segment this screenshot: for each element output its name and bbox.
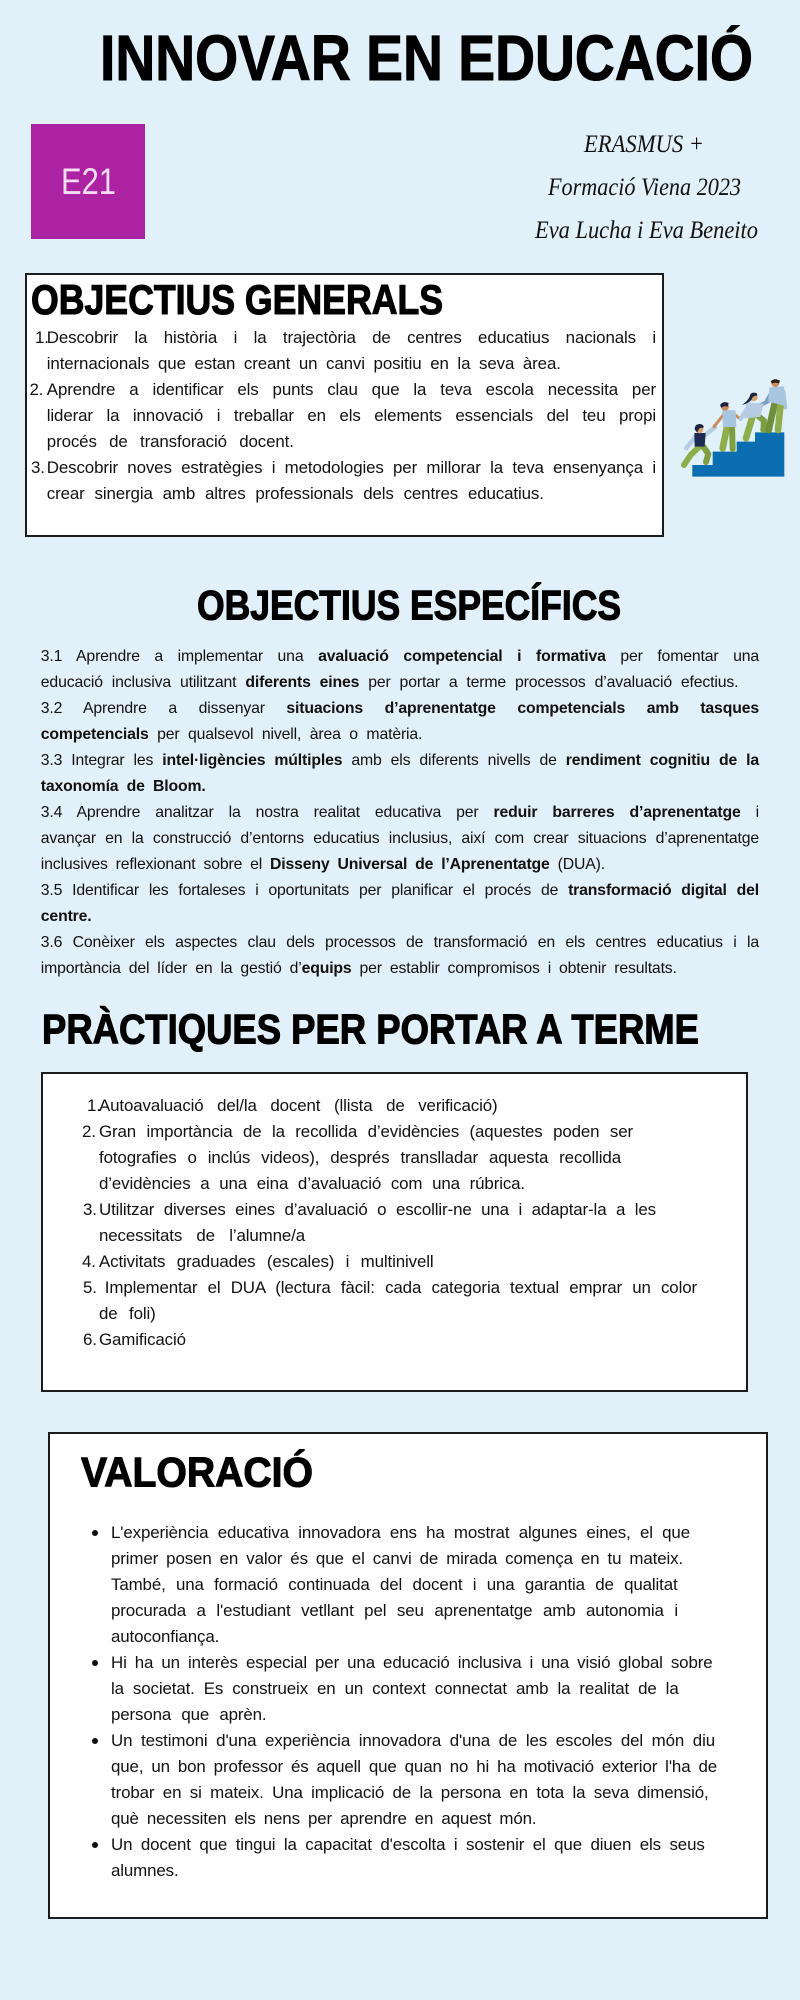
list: general objectives: Descobrir noves estratègies i metodologies per millorar la teva ensenyança i: [47, 458, 656, 477]
list: practices: 2.: [82, 1122, 96, 1141]
list: evaluation bullets: que, un bon professor és aquell que quan no hi ha motivació exterior l'ha de: [111, 1757, 717, 1776]
list: general objectives: crear sinergia amb altres professionals dels centres educatius.: [47, 484, 544, 503]
person 1: [684, 424, 715, 465]
text block: specific objectives: competencials per qualsevol nivell, àrea o matèria.: [41, 726, 422, 742]
text block: specific objectives: [40, 648, 760, 976]
text block: specific objectives: 3.5 Identificar les fortaleses i oportunitats per planificar el procés de transformació digital del: [41, 882, 759, 898]
list: evaluation bullets: què necessiten els nens per aprendre en aquest món.: [111, 1809, 536, 1828]
list: practices: [82, 1096, 697, 1349]
subtitle: Erasmus, training and authors: [534, 131, 758, 244]
list: practices: Gamificació: [99, 1330, 186, 1349]
panel: valoració: [48, 1432, 768, 1919]
text block: specific objectives: 3.4 Aprendre analitzar la nostra realitat educativa per reduir barreres d’aprenentatge i: [41, 804, 759, 820]
list: evaluation bullets: trobar en si mateix. Una implicació de la persona en tota la seva dimensió,: [111, 1783, 709, 1802]
text block: specific objectives: taxonomía de Bloom.: [41, 778, 206, 794]
person 2: [714, 402, 741, 449]
list: evaluation bullets: procurada a l'estudiant vetllant pel seu aprenentatge amb autonomia i: [111, 1601, 678, 1620]
list: general objectives: 3.: [31, 458, 45, 477]
list: practices: 4.: [82, 1252, 96, 1271]
list: evaluation bullets: alumnes.: [111, 1861, 179, 1880]
text block: specific objectives: 3.6 Conèixer els aspectes clau dels processos de transformació en els centres educatius i la: [41, 934, 759, 950]
list: evaluation bullets: Un docent que tingui la capacitat d'escolta i sostenir el que diuen els seus: [111, 1835, 705, 1854]
text block: specific objectives: importància del líder en la gestió d’equips per establir compromisos i obtenir resultats.: [41, 960, 677, 976]
list: practices: 3.: [83, 1200, 97, 1219]
list: practices: de foli): [99, 1304, 156, 1323]
text block: specific objectives: centre.: [41, 908, 92, 924]
panel: pràctiques: [41, 1072, 748, 1392]
subtitle: Erasmus, training and authors: Formació Viena 2023: [547, 174, 741, 201]
list: practices: Autoavaluació del/la docent (llista de verificació): [99, 1096, 498, 1115]
text block: specific objectives: inclusives reflexionant sobre el Disseny Universal de l’Aprenentatge (DUA).: [41, 856, 605, 872]
list: practices: Activitats graduades (escales) i multinivell: [99, 1252, 434, 1271]
list: evaluation bullets: També, una formació continuada del docent i una garantia de qualitat: [111, 1575, 678, 1594]
list: practices: necessitats de l’alumne/a: [99, 1226, 305, 1245]
list: practices: fotografies o inclús videos), després translladar aquesta recollida: [99, 1148, 621, 1167]
list: practices: 1.: [87, 1096, 101, 1115]
list: evaluation bullets: persona que aprèn.: [111, 1705, 266, 1724]
text block: specific objectives: 3.2 Aprendre a dissenyar situacions d’aprenentatge competencials amb tasques: [41, 700, 759, 716]
list: practices: d’evidències a una eina d’avaluació com una rúbrica.: [99, 1174, 525, 1193]
list: general objectives: [30, 328, 656, 503]
list: practices: Implementar el DUA (lectura fàcil: cada categoria textual emprar un color: [105, 1278, 697, 1297]
subtitle: Erasmus, training and authors: ERASMUS +: [583, 131, 704, 158]
list: practices: Gran importància de la recollida d’evidències (aquestes poden ser: [99, 1122, 633, 1141]
list: general objectives: Aprendre a identificar els punts clau que la teva escola necessita per: [47, 380, 656, 399]
text block: specific objectives: 3.1 Aprendre a implementar una avaluació competencial i formativa per fomentar una: [41, 648, 759, 664]
list: general objectives: 2.: [30, 380, 43, 399]
list: general objectives: internacionals que estan creant un canvi positiu en la seva àrea.: [47, 354, 561, 373]
icon: people climbing stairs helping each other: [681, 379, 788, 477]
list: evaluation bullets: primer posen en valor és que el canvi de mirada comença en tu mateix.: [111, 1549, 683, 1568]
list: practices: 6.: [83, 1330, 97, 1349]
icon: E21 logo: E21: [61, 161, 116, 202]
text block: specific objectives: 3.3 Integrar les intel·ligències múltiples amb els diferents nivells de rendiment cognitiu de la: [41, 752, 759, 768]
list: general objectives: liderar la innovació i treballar en els elements essencials del teu propi: [47, 406, 656, 425]
list: general objectives: 1.: [35, 328, 49, 347]
list: evaluation bullets: autoconfiança.: [111, 1627, 219, 1646]
list: evaluation bullets: la societat. Es construeix en un context connectat amb la realitat de la: [111, 1679, 679, 1698]
person 3: [741, 393, 768, 438]
list: evaluation bullets: Hi ha un interès especial per una educació inclusiva i una visió global sobre: [111, 1653, 712, 1672]
list: practices: 5.: [83, 1278, 97, 1297]
list: practices: Utilitzar diverses eines d’avaluació o escollir-ne una i adaptar-la a les: [99, 1200, 656, 1219]
icon: E21 logo: [31, 124, 145, 239]
text block: specific objectives: educació inclusiva utilitzant diferents eines per portar a terme processos d’avaluació efectius.: [41, 674, 738, 690]
list: general objectives: Descobrir la història i la trajectòria de centres educatius nacionals i: [47, 328, 656, 347]
stairs: [692, 432, 784, 477]
list: evaluation bullets: Un testimoni d'una experiència innovadora d'una de les escoles del món diu: [111, 1731, 715, 1750]
list: evaluation bullets: [92, 1523, 717, 1880]
text block: specific objectives: avançar en la construcció d’entorns educatius inclusius, així com crear situacions d’aprenentatge: [41, 830, 759, 846]
list: general objectives: procés de transforació docent.: [47, 432, 294, 451]
heading: pràctiques per portar a terme: PRÀCTIQUES PER PORTAR A TERME: [42, 1005, 699, 1053]
list: evaluation bullets: L'experiència educativa innovadora ens ha mostrat algunes eines, el que: [111, 1523, 690, 1542]
person 4: [767, 379, 785, 430]
panel: objectius generals: [25, 273, 664, 537]
